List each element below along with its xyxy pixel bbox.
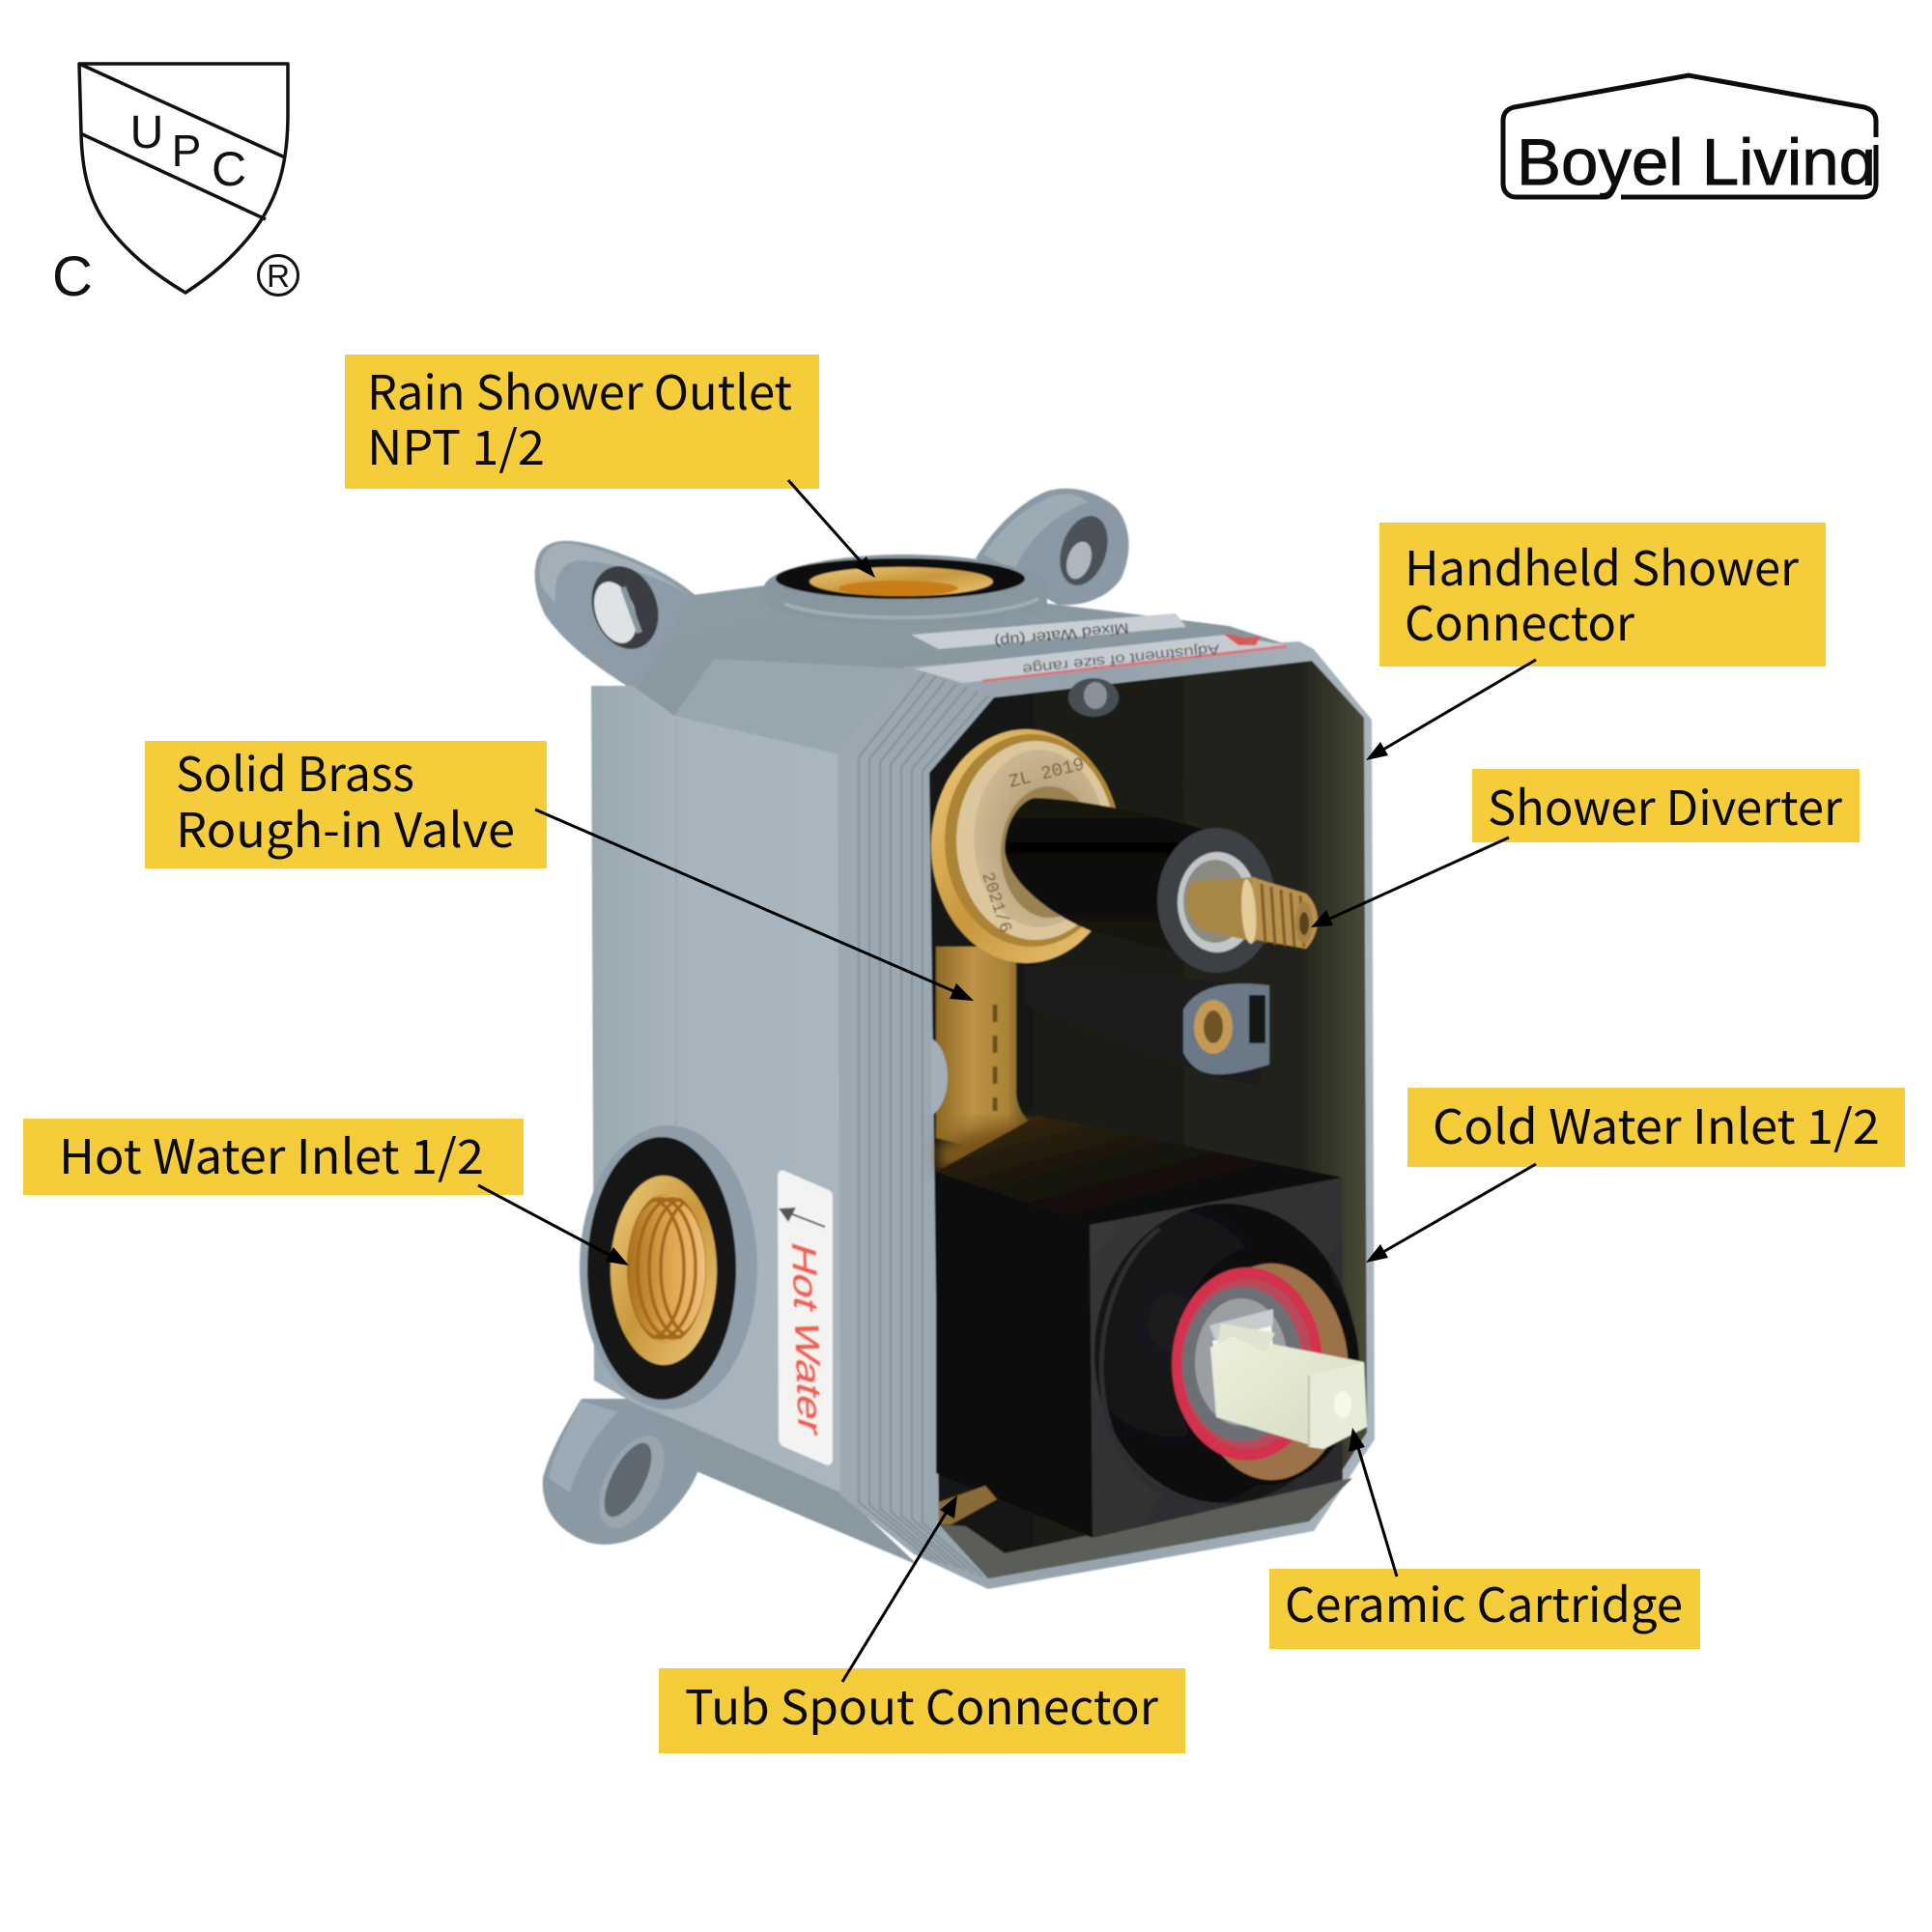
sticker: adjustment range bbox=[914, 633, 1288, 683]
bottom left mounting ear bbox=[543, 1399, 700, 1545]
sticker: mixed water bbox=[911, 613, 1186, 650]
arrow: shower diverter bbox=[1311, 838, 1509, 927]
black bar with grey socket bbox=[1024, 966, 1269, 1087]
label: shower diverter: Shower Diverter bbox=[1488, 771, 1843, 839]
hot water inlet port bbox=[580, 1125, 757, 1409]
label: rain shower outlet: NPT 1/2 bbox=[367, 411, 545, 479]
tub spout brass hint bbox=[939, 1486, 997, 1524]
icon: cUPC certification mark: R bbox=[267, 258, 290, 294]
sticker: mixed water: Mixed Water (up) bbox=[993, 619, 1129, 650]
icon: cUPC certification mark: P bbox=[172, 126, 201, 176]
logo: Boyel Living bbox=[1503, 75, 1884, 199]
warm reflection above cube bbox=[947, 1128, 1043, 1171]
bottom lip of the interior bbox=[939, 1478, 1352, 1578]
gold valve flange bbox=[931, 729, 1121, 963]
black round trim bbox=[1094, 1204, 1355, 1503]
top left mounting ear bbox=[535, 541, 697, 696]
label: ceramic cartridge: Ceramic Cartridge bbox=[1285, 1568, 1683, 1636]
right mounting ear bbox=[976, 489, 1128, 605]
screw bbox=[1068, 678, 1119, 717]
icon: cUPC certification mark: C bbox=[212, 142, 246, 196]
label: solid brass rough-in valve bbox=[145, 737, 547, 868]
icon: cUPC certification mark: C bbox=[52, 245, 93, 308]
small grey side circle bbox=[931, 1038, 948, 1116]
hot water sticker bbox=[778, 1171, 833, 1465]
frame around the opening bbox=[838, 641, 1375, 1589]
side face of box bbox=[591, 686, 918, 1565]
box bottom underside bbox=[637, 1405, 918, 1565]
cartridge opening bbox=[1172, 1245, 1359, 1485]
label: rain shower outlet: Rain Shower Outlet bbox=[367, 355, 792, 424]
escutcheon around the diverter bbox=[1157, 828, 1275, 973]
arrow: rain shower outlet bbox=[788, 480, 875, 578]
label: handheld shower connector: Handheld Shower bbox=[1405, 531, 1800, 600]
brass post bbox=[936, 947, 1038, 1169]
cream spindle bbox=[1210, 1323, 1367, 1449]
arrow: solid brass valve bbox=[535, 810, 974, 1001]
frame ribs bbox=[859, 672, 988, 1577]
product: rough-in valve box bbox=[535, 489, 1375, 1589]
label: solid brass rough-in valve: Solid Brass bbox=[176, 737, 414, 806]
label: rain shower outlet bbox=[345, 355, 819, 489]
hot water sticker: Hot Water bbox=[784, 1237, 830, 1440]
label: hot water inlet: Hot Water Inlet 1/2 bbox=[59, 1120, 484, 1188]
label: solid brass rough-in valve: Rough-in Valve bbox=[176, 793, 515, 862]
label: tub spout connector: Tub Spout Connector bbox=[685, 1670, 1159, 1739]
gold valve flange: ZL 2019 bbox=[1007, 753, 1087, 793]
gold valve flange: 2021/6 bbox=[977, 870, 1014, 935]
interior of box bbox=[929, 661, 1367, 1578]
arrow: handheld shower connector bbox=[1366, 660, 1536, 760]
arrow: hot water inlet bbox=[478, 1185, 629, 1265]
side face crease bbox=[675, 720, 677, 1125]
top port bbox=[764, 554, 1047, 624]
top face of box bbox=[631, 585, 1314, 754]
arrow: tub spout connector bbox=[842, 1495, 957, 1682]
label: cold water inlet: Cold Water Inlet 1/2 bbox=[1433, 1090, 1880, 1158]
arrow: cold water inlet bbox=[1366, 1164, 1536, 1263]
label: handheld shower connector: Connector bbox=[1405, 586, 1635, 655]
label: handheld shower connector bbox=[1379, 523, 1826, 667]
top face front band bbox=[674, 659, 908, 754]
icon: cUPC certification mark: U bbox=[130, 107, 163, 158]
black cylinder bbox=[1005, 798, 1236, 956]
arrow: ceramic cartridge bbox=[1349, 1428, 1397, 1577]
diverter stem bbox=[1186, 877, 1318, 949]
logo: Boyel Living: Boyel Living bbox=[1517, 126, 1876, 199]
icon: cUPC certification mark bbox=[52, 64, 298, 308]
sticker: adjustment range: Adjustment of size range bbox=[1022, 640, 1220, 677]
black cube bbox=[936, 1116, 1343, 1538]
